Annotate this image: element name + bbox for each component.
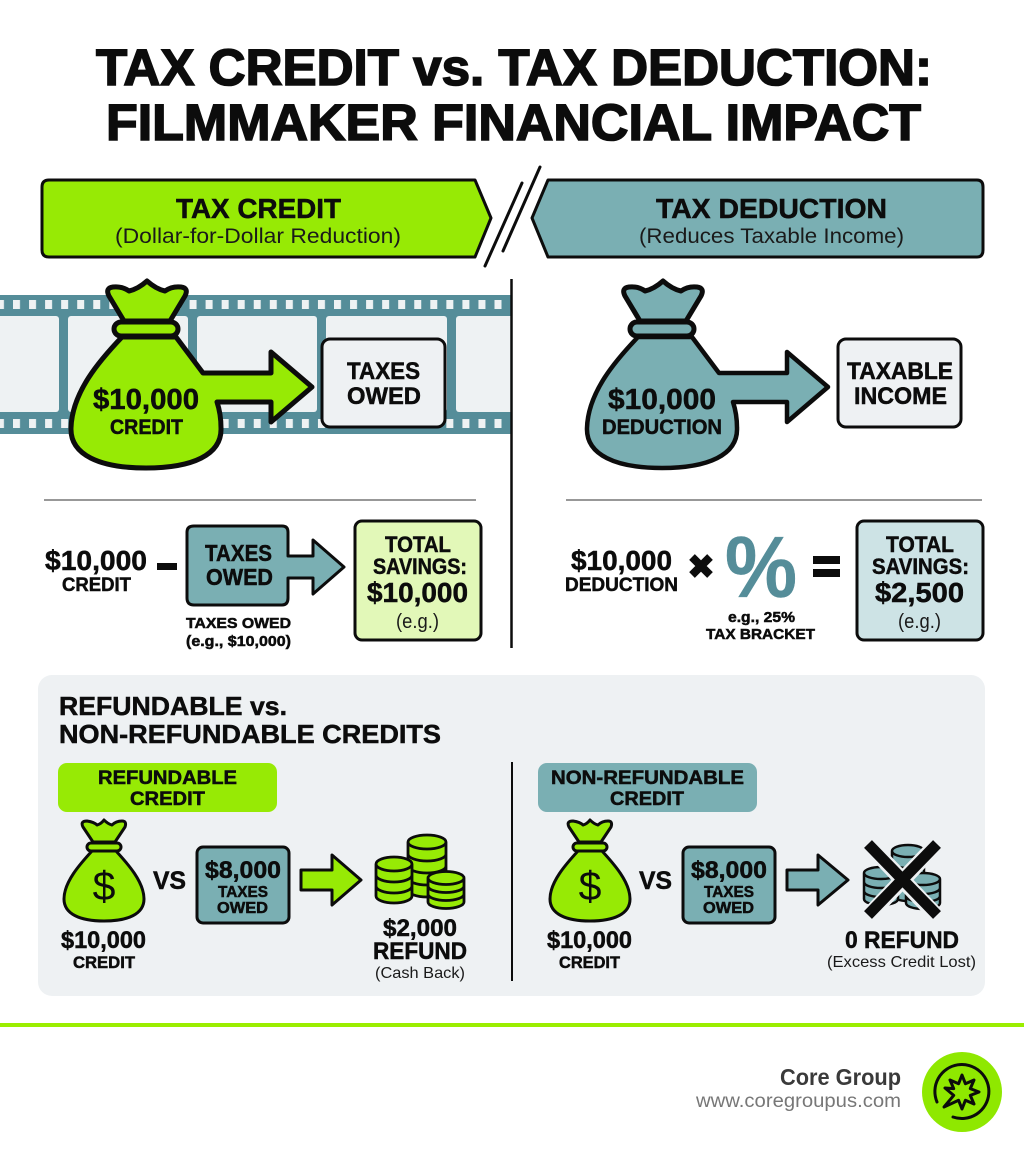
box: 8,000 taxes owed, non-refundable: TAXES bbox=[704, 884, 754, 901]
title bbox=[96, 39, 932, 151]
money bag with arrow: deduction bbox=[587, 281, 828, 468]
total savings: deduction: TOTAL bbox=[886, 532, 954, 557]
arrow: non-refundable bbox=[787, 855, 848, 905]
panel heading: REFUNDABLE vs. bbox=[59, 691, 287, 721]
header divider slashes bbox=[485, 167, 540, 266]
panel heading: NON-REFUNDABLE CREDITS bbox=[59, 719, 441, 749]
label: 2,000 refund bbox=[373, 915, 467, 982]
equation: deduction amount: $10,000 bbox=[571, 545, 672, 576]
box: 8,000 taxes owed, non-refundable: OWED bbox=[703, 900, 754, 917]
crossed-out coins bbox=[864, 844, 940, 915]
box: taxes owed: TAXES bbox=[347, 358, 420, 385]
label: 10,000 credit, non-refundable bbox=[547, 927, 632, 972]
footer brand text: www.coregroupus.com bbox=[695, 1091, 901, 1112]
box: taxes owed bbox=[322, 339, 445, 427]
header: tax deduction: TAX DEDUCTION bbox=[656, 193, 887, 224]
title: FILMMAKER FINANCIAL IMPACT bbox=[106, 94, 921, 151]
arrow: refundable bbox=[301, 855, 361, 905]
label: 2,000 refund: (Cash Back) bbox=[375, 965, 465, 982]
label: 2,000 refund: REFUND bbox=[373, 938, 467, 965]
taxes owed caption bbox=[186, 616, 291, 650]
header: tax deduction: (Reduces Taxable Income) bbox=[639, 225, 904, 248]
money bag with arrow: credit: CREDIT bbox=[110, 416, 183, 439]
total savings: deduction: SAVINGS: bbox=[872, 554, 969, 579]
film strip bbox=[0, 290, 517, 440]
money bag: non-refundable bbox=[550, 820, 630, 921]
pill: non-refundable credit: CREDIT bbox=[610, 789, 684, 810]
label: 10,000 credit: CREDIT bbox=[73, 953, 136, 972]
box: 8,000 taxes owed: TAXES bbox=[218, 884, 268, 901]
pill: non-refundable credit: NON-REFUNDABLE bbox=[551, 768, 744, 789]
panel: refundable vs non-refundable bbox=[38, 675, 985, 996]
total savings: deduction bbox=[857, 521, 983, 640]
tax bracket caption: TAX BRACKET bbox=[706, 627, 815, 643]
label: 0 refund: 0 REFUND bbox=[845, 927, 959, 954]
money bag with arrow: deduction: $10,000 bbox=[608, 384, 716, 416]
taxes owed caption: TAXES OWED bbox=[186, 616, 291, 632]
label: 10,000 credit, non-refundable: CREDIT bbox=[559, 953, 621, 972]
label: 10,000 credit bbox=[61, 927, 146, 972]
equation: credit amount bbox=[45, 545, 147, 596]
taxes owed caption: (e.g., $10,000) bbox=[186, 634, 291, 650]
money bag with arrow: credit: $10,000 bbox=[93, 384, 199, 416]
box: 8,000 taxes owed: $8,000 bbox=[205, 857, 281, 884]
money bag with arrow: deduction: DEDUCTION bbox=[602, 416, 722, 439]
vs label: VS bbox=[153, 867, 186, 895]
footer brand text: Core Group bbox=[780, 1064, 901, 1090]
money bag with arrow: credit bbox=[71, 281, 312, 468]
tax bracket caption: e.g., 25% bbox=[728, 610, 795, 626]
total savings: deduction: $2,500 bbox=[875, 577, 964, 608]
equation: credit amount: $10,000 bbox=[45, 545, 147, 576]
box: taxable income bbox=[838, 339, 961, 427]
center divider bbox=[510, 279, 513, 648]
label: 10,000 credit: $10,000 bbox=[61, 927, 146, 954]
total savings: deduction: (e.g.) bbox=[898, 611, 941, 633]
footer logo bbox=[922, 1052, 1002, 1132]
total savings: credit: SAVINGS: bbox=[373, 554, 467, 579]
total savings: credit: (e.g.) bbox=[396, 611, 439, 633]
pill: refundable credit: CREDIT bbox=[130, 789, 205, 810]
box: taxable income: INCOME bbox=[854, 383, 947, 410]
tax bracket caption bbox=[706, 610, 815, 643]
label: 0 refund: (Excess Credit Lost) bbox=[827, 954, 976, 971]
vs label, non-refundable: VS bbox=[639, 867, 672, 895]
equation: credit amount: CREDIT bbox=[62, 575, 131, 596]
total savings: credit bbox=[355, 521, 481, 640]
title: TAX CREDIT vs. TAX DEDUCTION: bbox=[96, 39, 932, 96]
equation: deduction amount: DEDUCTION bbox=[565, 575, 678, 596]
header: tax credit: TAX CREDIT bbox=[176, 193, 341, 224]
taxes owed arrow box: TAXES bbox=[205, 540, 272, 566]
multiply sign bbox=[692, 557, 710, 575]
money bag: non-refundable: $ bbox=[579, 863, 602, 909]
box: 8,000 taxes owed bbox=[197, 847, 289, 923]
box: 8,000 taxes owed, non-refundable bbox=[683, 847, 775, 923]
money bag: refundable bbox=[64, 820, 144, 921]
box: taxable income: TAXABLE bbox=[847, 358, 953, 385]
header: tax deduction bbox=[532, 180, 983, 257]
minus sign bbox=[157, 563, 177, 570]
footer brand text bbox=[695, 1064, 901, 1112]
equals sign bbox=[813, 556, 840, 577]
total savings: credit: TOTAL bbox=[385, 532, 451, 557]
taxes owed arrow box: OWED bbox=[206, 564, 273, 590]
percent symbol: % bbox=[725, 520, 797, 616]
coins: refund bbox=[376, 835, 464, 909]
box: taxes owed: OWED bbox=[347, 383, 421, 410]
pill: refundable credit: REFUNDABLE bbox=[98, 768, 237, 789]
taxes owed arrow box bbox=[187, 526, 344, 605]
pill: refundable credit bbox=[58, 763, 277, 812]
label: 0 refund bbox=[827, 927, 976, 971]
label: 10,000 credit, non-refundable: $10,000 bbox=[547, 927, 632, 954]
panel heading bbox=[59, 691, 441, 749]
money bag: refundable: $ bbox=[93, 863, 116, 909]
box: 8,000 taxes owed: OWED bbox=[217, 900, 268, 917]
total savings: credit: $10,000 bbox=[367, 577, 468, 608]
label: 2,000 refund: $2,000 bbox=[383, 915, 457, 942]
header: tax credit: (Dollar-for-Dollar Reduction) bbox=[115, 225, 401, 248]
pill: non-refundable credit bbox=[538, 763, 757, 812]
box: 8,000 taxes owed, non-refundable: $8,000 bbox=[691, 857, 767, 884]
equation: deduction amount bbox=[565, 545, 678, 596]
header: tax credit bbox=[42, 180, 491, 257]
